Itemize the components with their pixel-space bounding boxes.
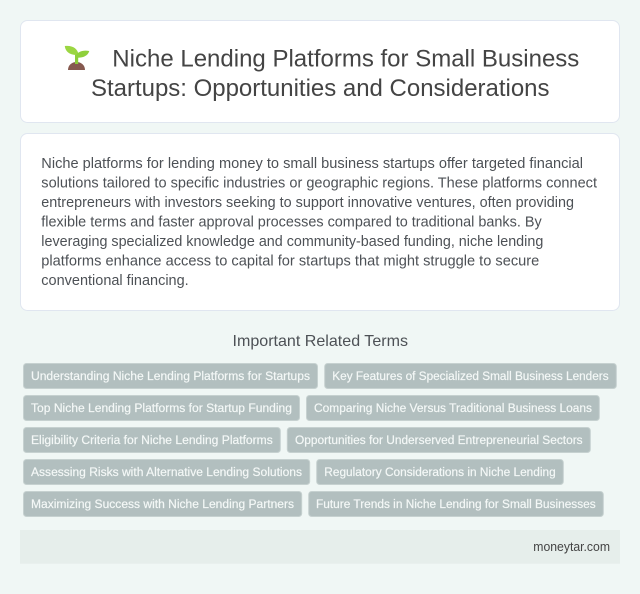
chip: regulatory — [317, 460, 563, 484]
text block: introduction paragraph — [41, 156, 597, 289]
chip: comparing: Comparing Niche Versus Traditional Business Loans — [314, 401, 592, 415]
title — [91, 46, 579, 102]
chip: understanding — [24, 364, 318, 388]
chip: eligibility — [24, 428, 280, 452]
title: Niche Lending Platforms for Small Business — [112, 46, 579, 73]
panel: introduction — [20, 134, 620, 310]
text block: introduction paragraph: solutions tailored to specific industries or geographic regions. These platforms connect — [41, 176, 597, 192]
chip: opportunities — [287, 428, 590, 452]
text block: introduction paragraph: platforms enhance access to capital for startups that might struggle to secure — [41, 254, 539, 270]
text block: introduction paragraph: conventional financing. — [41, 273, 189, 289]
text block: introduction paragraph: leveraging specialized knowledge and community-based funding, niche lending — [41, 234, 543, 250]
chip: regulatory: Regulatory Considerations in Niche Lending — [324, 465, 556, 479]
title: Startups: Opportunities and Considerations — [91, 75, 550, 102]
icon: seedling — [65, 46, 89, 70]
chip: eligibility: Eligibility Criteria for Niche Lending Platforms — [31, 433, 273, 447]
heading: related terms: Important Related Terms — [232, 333, 408, 350]
footer: moneytar.com — [533, 540, 610, 554]
text block: introduction paragraph: entrepreneurs with investors seeking to support innovative ventures, often providing — [41, 195, 574, 211]
panel: title card — [20, 20, 620, 122]
panel: related term chips — [24, 364, 616, 516]
chip: opportunities: Opportunities for Underserved Entrepreneurial Sectors — [295, 433, 583, 447]
chip: maximizing — [24, 492, 302, 516]
chip: top platforms: Top Niche Lending Platforms for Startup Funding — [31, 401, 292, 415]
chip: assessing risks: Assessing Risks with Alternative Lending Solutions — [31, 465, 302, 479]
chip: key features — [325, 364, 616, 388]
chip: maximizing: Maximizing Success with Niche Lending Partners — [31, 497, 294, 511]
text block: introduction paragraph: flexible terms and faster approval processes compared to traditional banks. By — [41, 214, 542, 230]
chip: understanding: Understanding Niche Lending Platforms for Startups — [31, 369, 310, 383]
chip: top platforms — [24, 396, 300, 420]
chip: future trends — [309, 492, 603, 516]
chip: comparing — [306, 396, 599, 420]
chip: key features: Key Features of Specialized Small Business Lenders — [332, 369, 609, 383]
chip: future trends: Future Trends in Niche Lending for Small Businesses — [316, 497, 596, 511]
footer — [20, 530, 620, 564]
chip: assessing risks — [24, 460, 310, 484]
text block: introduction paragraph: Niche platforms for lending money to small business startups offer targeted financial — [41, 156, 583, 172]
